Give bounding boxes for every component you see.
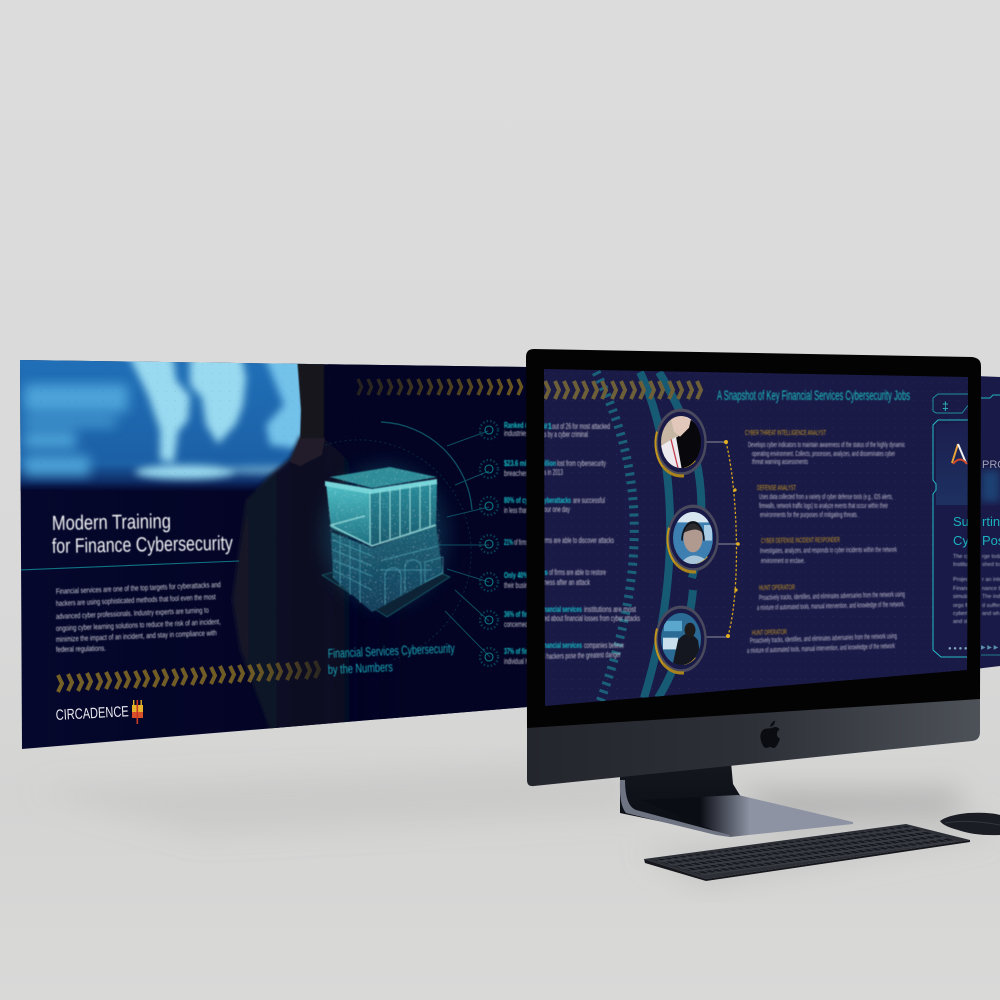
title: for Finance Cybersecurity <box>52 532 234 558</box>
card: project panel left part: Sup <box>953 514 976 529</box>
stats text continued: our one day <box>544 505 570 514</box>
mouse <box>940 813 1000 835</box>
card: project panel left part: ● ● ● ● <box>948 646 968 652</box>
intro text block <box>56 580 221 654</box>
portrait: woman analyst <box>655 410 706 476</box>
role: hunt operator two <box>747 629 897 655</box>
title <box>52 510 234 558</box>
photo: silhouette of man <box>232 364 526 728</box>
chevron strip: lower <box>58 661 319 692</box>
stat text fragments: 80% of cy <box>504 496 528 505</box>
card: project panel left part: simulat <box>953 594 971 600</box>
card: project panel left part: orgs fin <box>953 603 971 609</box>
stat text fragments: individual h <box>504 657 528 666</box>
card: project panel left part: Project <box>953 577 971 583</box>
callout heading: by the numbers: by the Numbers <box>327 659 393 677</box>
building illustration <box>322 465 450 617</box>
portrait: operator at screens <box>655 607 706 673</box>
stat text fragments: industries <box>504 429 528 438</box>
stats text continued: s <box>544 568 548 577</box>
title: Modern Training <box>52 510 171 535</box>
stats text continued: are successful <box>573 496 605 505</box>
stats text continued: #1 <box>543 422 553 431</box>
role: incident responder <box>760 537 897 565</box>
role: hunt operator one <box>757 584 905 612</box>
stat text fragments <box>504 421 528 666</box>
stats text continued: companies believe <box>584 641 624 650</box>
stats text continued: nancial services <box>544 605 582 614</box>
stat text fragments: in less than <box>504 506 528 515</box>
desk shadows <box>30 760 990 890</box>
intro text block: hackers are using sophisticated methods that fool even the most <box>56 592 217 608</box>
logo: Circadence: CIRCADENCE <box>55 703 129 724</box>
stats text continued: yberattacks <box>544 496 571 505</box>
divider line <box>20 561 239 570</box>
radial hud rings around building <box>325 422 490 660</box>
panel: right infographic panel behind monitor <box>975 376 1000 669</box>
card: project panel left part: The cyb <box>953 554 973 560</box>
icon: card tab emblem: ‡ <box>942 399 949 413</box>
stats text continued: ness after an attack <box>544 578 591 587</box>
monitor: stand <box>620 762 853 837</box>
portrait: man with headset <box>667 506 718 572</box>
stats text continued: institutions are most <box>584 605 637 614</box>
chevron strip <box>545 381 701 399</box>
panel: right infographic panel behind monitor: shed to <box>982 562 1000 568</box>
intro text block: Financial services are one of the top targets for cyberattacks and <box>56 580 221 596</box>
icon: apple logo <box>760 720 780 748</box>
role: hunt operator one: HUNT OPERATOR <box>759 584 795 592</box>
card: project panel left part: Finance <box>953 586 973 592</box>
stat text fragments: 36% of fin <box>504 610 528 619</box>
role: incident responder: Investigates, analyzes, and responds to cyber incidents within the network <box>760 545 897 555</box>
role: hunt operator two: HUNT OPERATOR <box>752 629 787 637</box>
stat text fragments: 37% of fin <box>504 647 528 656</box>
stat text fragments: 21% <box>504 538 513 547</box>
role: defense analyst: DEFENSE ANALYST <box>757 485 796 492</box>
card: project panel left part <box>932 394 968 658</box>
callout heading: by the numbers: Financial Services Cybersecurity <box>327 640 455 661</box>
card: project panel left part: Cyb <box>953 533 976 548</box>
stat text fragments: Ranked # <box>504 421 528 430</box>
stats text continued <box>543 422 640 661</box>
stats text continued: nancial services <box>544 641 582 650</box>
monitor screen <box>540 365 976 710</box>
stats text continued: s by a cyber criminal <box>544 430 588 439</box>
role: threat intelligence analyst <box>745 430 905 466</box>
stats text continued: ed about financial losses from cyber attacks <box>544 614 640 623</box>
intro text block: ongoing cyber learning solutions to reduce the risk of an incident, <box>56 617 221 633</box>
stat text fragments: $23.6 mil <box>504 459 528 468</box>
card: project panel left part: and sta <box>953 619 972 625</box>
role: threat intelligence analyst: CYBER THREAT INTELLIGENCE ANALYST <box>745 430 826 437</box>
stat icons: gear targets <box>480 421 498 666</box>
intro text block: advanced cyber professionals. Industry experts are turning to <box>56 606 209 621</box>
callout heading: by the numbers <box>327 640 455 677</box>
stat text fragments: their busin <box>504 581 528 590</box>
job list: five role descriptions <box>745 430 905 655</box>
role: threat intelligence analyst: threat warning assessments <box>752 457 808 466</box>
stats text continued: rms are able to discover attacks <box>544 536 614 545</box>
panel: right infographic panel behind monitor: d suffer <box>982 603 1000 609</box>
monitor: black bezel <box>526 349 981 728</box>
connector: yellow dotted arc <box>705 440 740 638</box>
icon: logo cross <box>132 700 143 724</box>
stats text continued: out of 26 for most attacked <box>552 422 610 431</box>
role: incident responder: CYBER DEFENSE INCIDENT RESPONDER <box>761 537 840 545</box>
photo: blurred world map screen <box>20 350 320 491</box>
teal arc bands <box>640 372 701 698</box>
card: project panel left part: cyberth <box>953 611 971 617</box>
stats text continued: l hackers pose the greatest danger <box>544 650 621 661</box>
intro text block: federal regulations. <box>56 644 106 654</box>
stat text fragments: of firms <box>514 538 528 547</box>
intro text block: minimize the impact of an incident, and stay in compliance with <box>56 628 217 644</box>
stats text continued: of firms are able to restore <box>549 568 606 577</box>
role: defense analyst: Uses data collected from a variety of cyber defense tools (e.g., IDS alerts, <box>759 492 893 501</box>
role: defense analyst: firewalls, network traffic logs) to analyze events that occur within their <box>759 501 888 510</box>
card: project panel left part: Institut <box>953 562 970 568</box>
monitor: chin with logo <box>527 698 980 786</box>
stat text fragments: breaches <box>504 469 528 478</box>
stat text fragments: Only 40% <box>504 571 528 580</box>
stat text fragments: concerned <box>504 620 528 629</box>
chevron strip: upper <box>358 379 522 395</box>
icon: triangle logo <box>952 444 967 464</box>
role: defense analyst: environments for the purposes of mitigating threats. <box>760 510 858 519</box>
stats text continued: illion <box>544 459 556 468</box>
stats text continued: s in 2013 <box>544 468 563 477</box>
role: incident responder: environment or enclave. <box>761 556 805 565</box>
stats text continued: lost from cybersecurity <box>557 459 606 468</box>
panel: right infographic panel behind monitor: and wh <box>982 611 1000 617</box>
hud tick arc <box>596 372 634 702</box>
keyboard <box>644 824 970 881</box>
panel: left infographic panel <box>20 350 530 760</box>
panel: right infographic panel behind monitor: ▶ ▶ ▶ <box>981 645 999 651</box>
role: defense analyst <box>757 485 893 519</box>
